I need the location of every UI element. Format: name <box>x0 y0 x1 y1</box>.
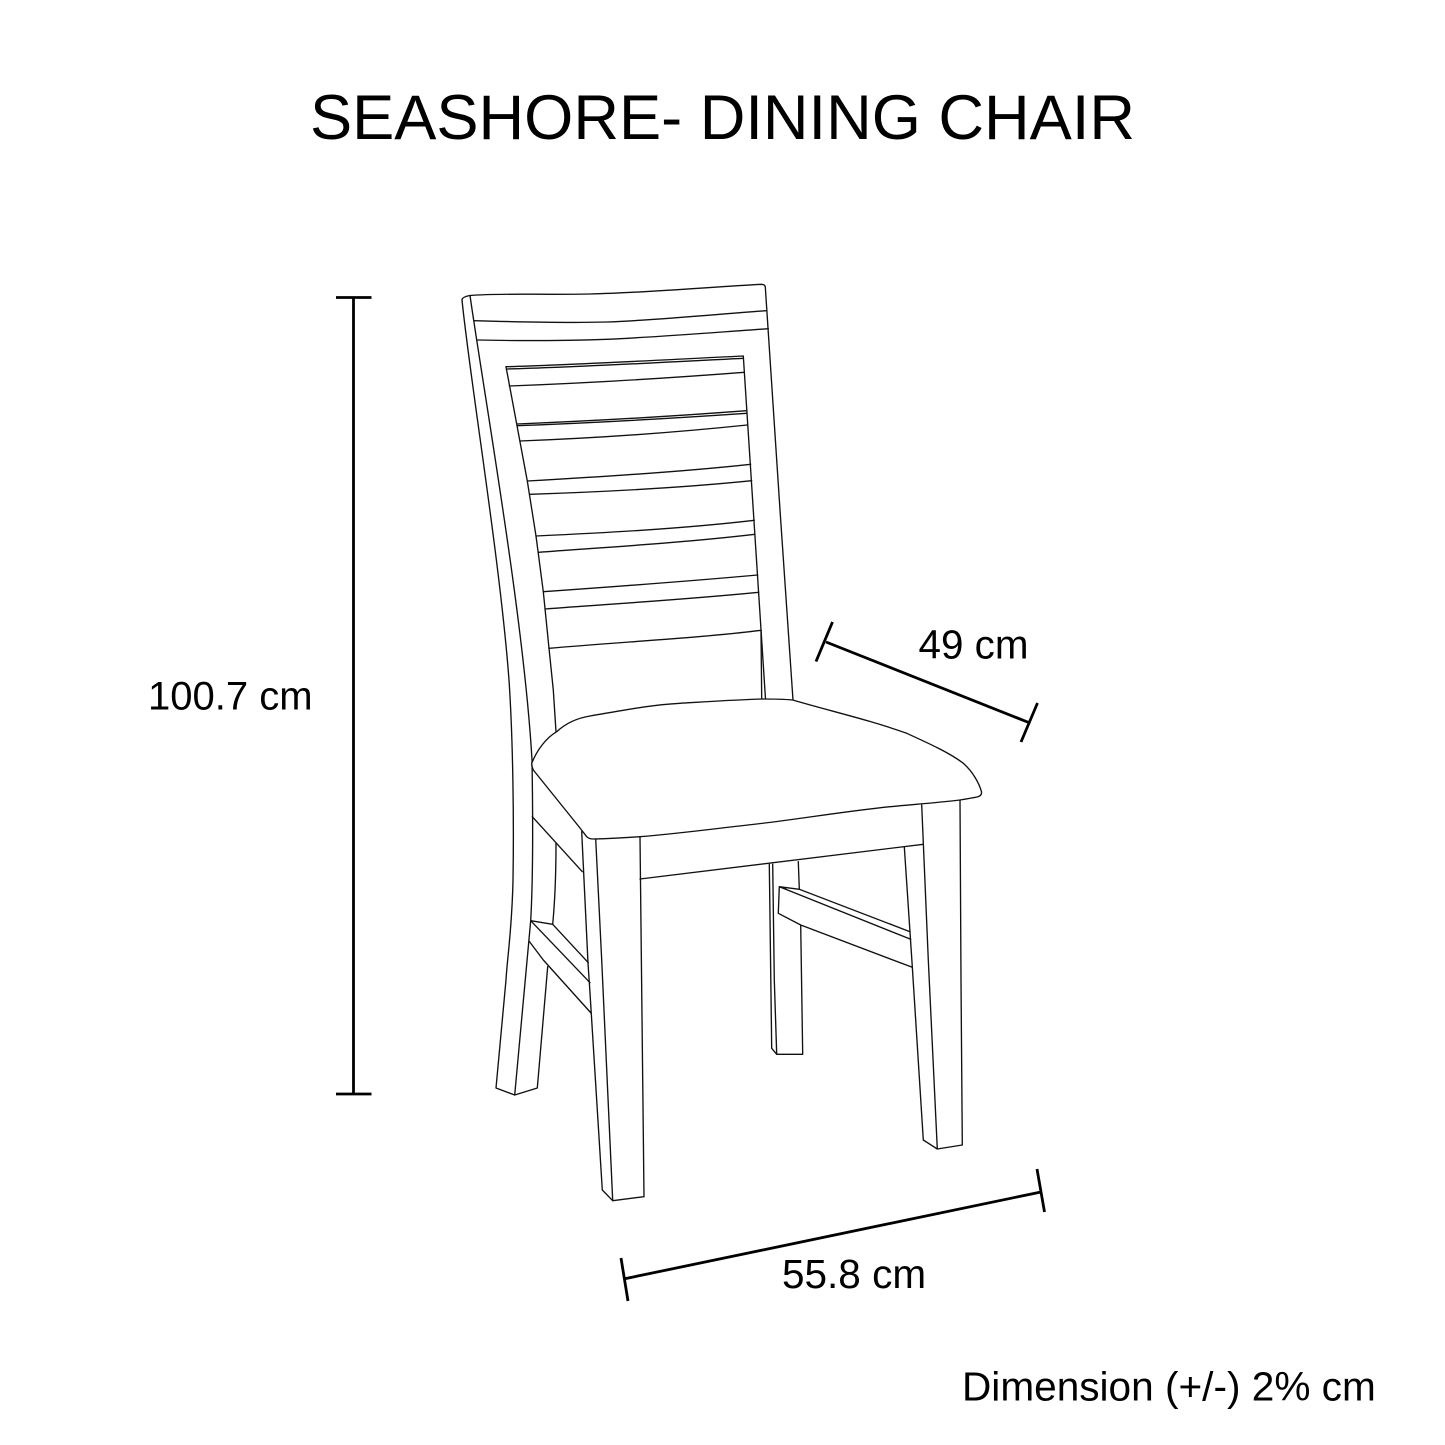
dimension: depth 49 cm: 49 cm <box>918 622 1028 668</box>
chair back frame <box>462 284 793 1095</box>
chair line drawing <box>462 284 982 1201</box>
title: SEASHORE- DINING CHAIR <box>310 83 1135 153</box>
dimension: depth 49 cm <box>816 622 1038 742</box>
right side stretcher <box>778 887 912 967</box>
back panel opening <box>506 356 766 732</box>
tolerance note: Dimension (+/-) 2% cm <box>962 1364 1376 1410</box>
dimension: height 100.7 cm <box>148 297 372 1094</box>
dimension: width 55.8 cm <box>621 1169 1044 1301</box>
front left leg <box>582 832 644 1201</box>
left side stretcher <box>529 843 591 1013</box>
front right leg <box>904 800 962 1149</box>
upholstered seat <box>532 699 982 839</box>
front apron <box>640 844 923 879</box>
dimension: width 55.8 cm: 55.8 cm <box>782 1251 926 1297</box>
dimension: height 100.7 cm: 100.7 cm <box>148 674 313 718</box>
back slats <box>509 372 761 648</box>
back right leg <box>769 862 803 1054</box>
side rail <box>532 817 582 872</box>
